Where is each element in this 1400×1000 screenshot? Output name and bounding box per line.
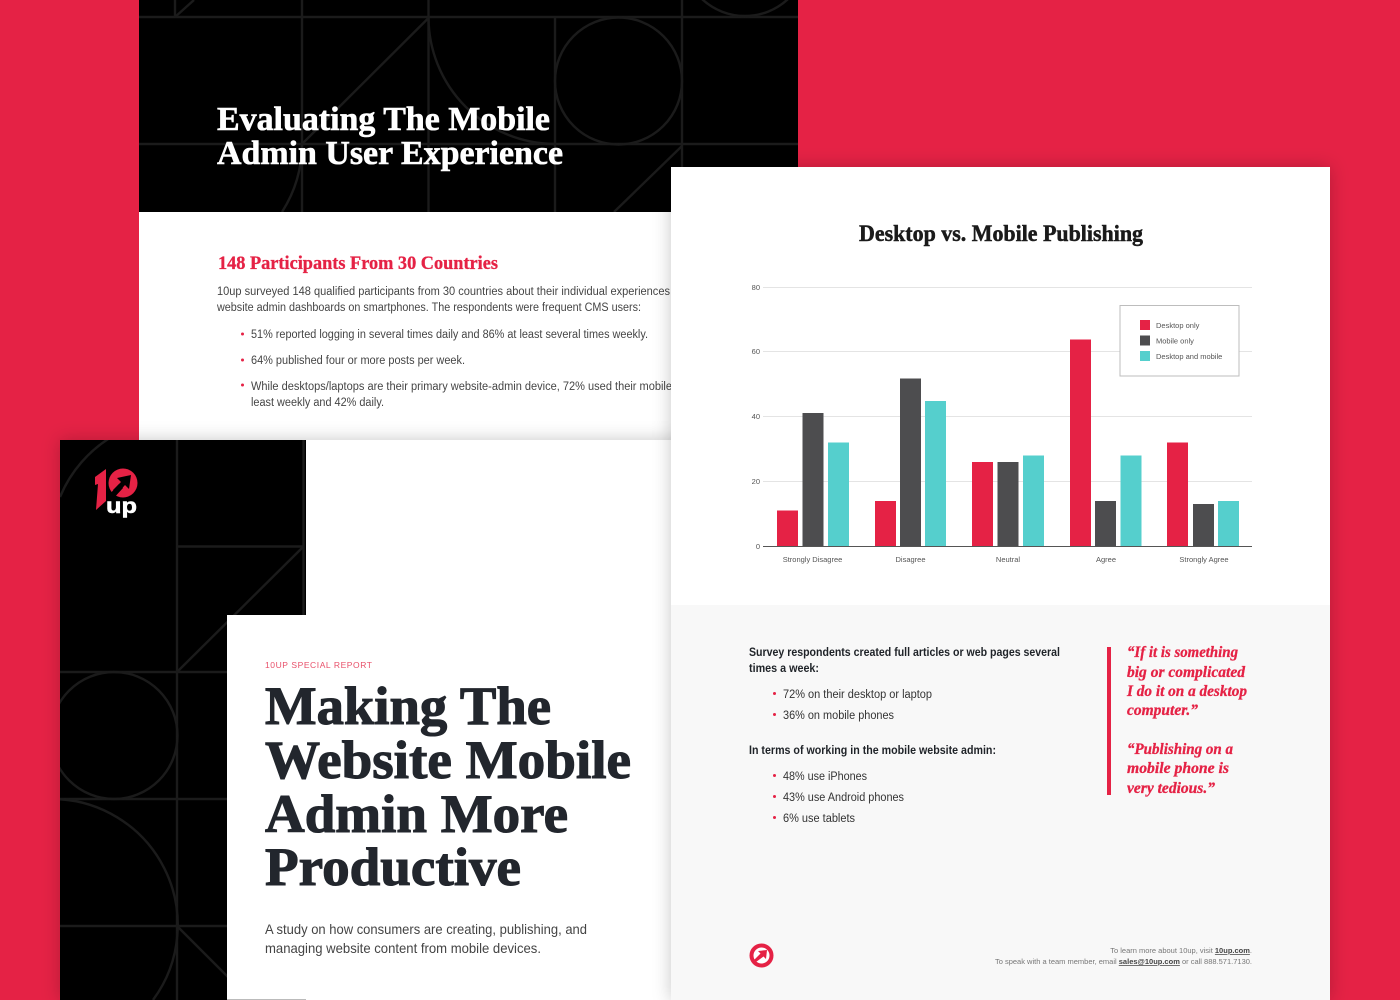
x axis labels: Strongly Agree <box>1179 555 1229 564</box>
callout: quotes: “Publishing on a <box>1127 741 1233 758</box>
text block: mobile admin stats <box>749 745 996 825</box>
intro paragraph <box>216 286 670 314</box>
bars: desktop only <box>777 340 1188 546</box>
bullet list: least weekly and 42% daily. <box>251 397 384 409</box>
cover heading: Productive <box>265 837 521 897</box>
text block: article stats <box>749 647 1060 722</box>
icon: footer logo <box>752 946 772 966</box>
cover pattern <box>50 436 306 1000</box>
bullet list: While desktops/laptops are their primary website-admin device, 72% used their mobile <box>251 381 672 393</box>
cover heading: Admin More <box>265 784 568 844</box>
x axis labels: Disagree <box>895 555 926 564</box>
panel: front cover <box>50 436 700 1000</box>
title: Evaluating The Mobile <box>217 101 550 138</box>
text block: mobile admin stats: 6% use tablets <box>783 813 855 825</box>
callout: quotes: big or complicated <box>1127 664 1245 681</box>
legend <box>1120 306 1239 376</box>
bullet list: 51% reported logging in several times daily and 86% at least several times weekly. <box>251 329 648 341</box>
y axis labels: 80 <box>752 283 760 292</box>
y axis labels: 0 <box>756 542 760 551</box>
title: Admin User Experience <box>217 135 563 172</box>
legend: Desktop and mobile <box>1156 352 1222 361</box>
footer contact text <box>995 946 1252 966</box>
cover subtitle: A study on how consumers are creating, publishing, and <box>265 921 587 937</box>
white inset <box>227 615 700 1000</box>
panel: right report page <box>671 167 1330 1000</box>
callout: quotes: very tedious.” <box>1127 780 1215 797</box>
y axis labels <box>752 283 760 551</box>
icon: 10up logo <box>95 468 138 518</box>
panel: back report page <box>139 0 808 460</box>
text block: article stats: 72% on their desktop or laptop <box>783 689 932 701</box>
bar chart <box>752 283 1252 564</box>
cover heading: Making The <box>265 676 551 736</box>
callout: quotes: I do it on a desktop <box>1126 683 1247 700</box>
text block: mobile admin stats: 43% use Android phones <box>783 792 904 804</box>
title <box>217 101 563 172</box>
text block: article stats: Survey respondents created full articles or web pages several <box>749 647 1060 659</box>
bars: desktop and mobile <box>828 401 1239 546</box>
x axis labels: Strongly Disagree <box>783 555 842 564</box>
footer contact text: To speak with a team member, email sales@10up.com or call 888.571.7130. <box>995 957 1252 966</box>
cover heading <box>265 676 631 897</box>
callout: quotes: computer.” <box>1127 702 1198 719</box>
callout: quotes: “If it is something <box>1127 644 1238 661</box>
section heading: 148 Participants From 30 Countries <box>218 254 498 274</box>
icon: 10up logo: up <box>106 495 137 518</box>
callout: quotes: mobile phone is <box>1127 760 1229 777</box>
chart title: Desktop vs. Mobile Publishing <box>859 221 1143 246</box>
header band <box>139 0 808 212</box>
text block: article stats: 36% on mobile phones <box>783 710 894 722</box>
cover heading: Website Mobile <box>265 730 631 790</box>
intro paragraph: 10up surveyed 148 qualified participants from 30 countries about their individual experiences <box>217 286 670 298</box>
intro paragraph: website admin dashboards on smartphones. The respondents were frequent CMS users: <box>216 302 641 314</box>
bullet list <box>241 329 672 409</box>
text block: article stats: times a week: <box>749 663 819 675</box>
x axis labels <box>783 555 1229 564</box>
x axis labels: Agree <box>1096 555 1116 564</box>
eyebrow: 10UP SPECIAL REPORT <box>265 660 372 670</box>
text block: mobile admin stats: In terms of working in the mobile website admin: <box>749 745 996 757</box>
bars: mobile only <box>802 378 1214 546</box>
bullet list: 64% published four or more posts per week. <box>251 355 465 367</box>
footer contact text: To learn more about 10up, visit 10up.com. <box>1110 946 1252 955</box>
cover subtitle <box>265 921 587 956</box>
x axis labels: Neutral <box>996 555 1020 564</box>
legend: Desktop only <box>1156 321 1200 330</box>
text block: mobile admin stats: 48% use iPhones <box>783 771 867 783</box>
y axis labels: 40 <box>752 412 760 421</box>
y axis labels: 20 <box>752 477 760 486</box>
legend: Mobile only <box>1156 336 1194 346</box>
cover subtitle: managing website content from mobile devices. <box>265 940 541 956</box>
callout: quotes <box>1107 644 1247 797</box>
y axis labels: 60 <box>752 347 760 356</box>
